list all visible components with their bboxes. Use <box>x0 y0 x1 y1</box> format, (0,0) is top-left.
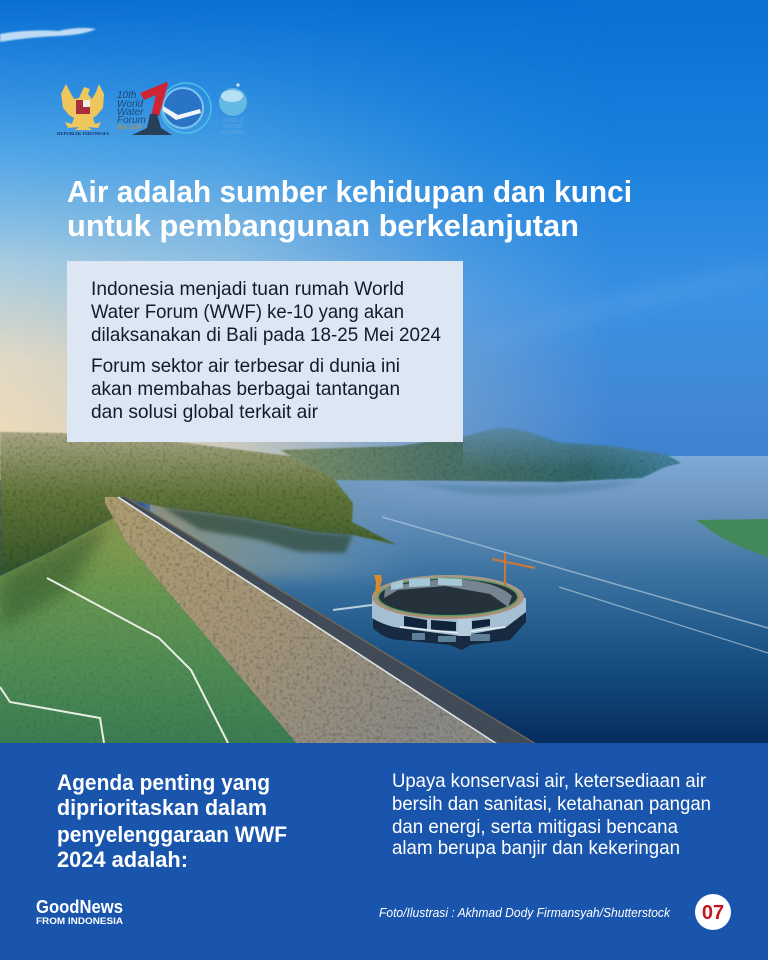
GoodNews logo: FROM INDONESIA <box>36 916 124 926</box>
title: untuk pembangunan berkelanjutan <box>67 208 579 243</box>
walkway <box>333 605 372 610</box>
panel text: host statement <box>91 278 441 346</box>
page number badge: 07 <box>702 902 724 924</box>
panel text: forum statement: akan membahas berbagai tantangan <box>91 378 400 400</box>
logos row <box>57 82 247 136</box>
logo: World Water Council: WATER <box>223 124 243 130</box>
green embankment <box>0 518 297 744</box>
logo: 10th World Water Forum: 10th <box>117 90 137 101</box>
logo: 10th World Water Forum: Bali 2024 <box>117 125 143 131</box>
panel text: host statement: dilaksanakan di Bali pada 18-25 Mei 2024 <box>91 324 441 346</box>
agenda description: alam berupa banjir dan kekeringan <box>392 837 680 859</box>
bottom band <box>0 743 768 960</box>
near forest <box>0 432 397 576</box>
panel text: forum statement <box>91 355 400 423</box>
logo: 10th World Water Forum <box>117 82 211 135</box>
agenda description: dan energi, serta mitigasi bencana <box>392 816 678 838</box>
panel text: forum statement: Forum sektor air terbesar di dunia ini <box>91 355 400 377</box>
background: sky <box>0 0 768 480</box>
water <box>150 456 768 744</box>
info panel <box>67 261 463 442</box>
logo: 10th World Water Forum: World <box>117 99 144 110</box>
dam road <box>118 496 537 744</box>
tower walls <box>372 596 526 636</box>
agenda heading <box>57 770 287 872</box>
agenda heading: penyelenggaraan WWF <box>57 822 287 847</box>
tower ring <box>372 575 524 619</box>
page number badge <box>695 894 731 930</box>
agenda description <box>392 770 711 859</box>
logo: garuda: REPUBLIK INDONESIA <box>57 131 109 136</box>
logo: 10th World Water Forum: Water <box>117 107 144 118</box>
photo credit: Foto/Ilustrasi : Akhmad Dody Firmansyah/Shutterstock <box>379 905 671 920</box>
title: Air adalah sumber kehidupan dan kunci <box>67 174 632 209</box>
GoodNews logo: GoodNews <box>36 897 123 917</box>
logo: World Water Council: WORLD <box>223 118 243 124</box>
GoodNews logo <box>36 897 124 926</box>
panel text: host statement: Water Forum (WWF) ke-10 yang akan <box>91 301 404 323</box>
crane <box>492 553 535 586</box>
title <box>67 174 632 243</box>
photo: reservoir and dam <box>0 428 768 744</box>
far hill <box>280 428 681 495</box>
agenda heading: diprioritaskan dalam <box>57 795 267 820</box>
logo: garuda <box>57 84 109 136</box>
agenda heading: 2024 adalah: <box>57 847 188 872</box>
logo: World Water Council: COUNCIL <box>221 130 245 136</box>
intake tower <box>333 553 535 650</box>
water lines <box>382 517 768 653</box>
agenda heading: Agenda penting yang <box>57 770 270 795</box>
floating vegetation <box>696 519 768 557</box>
agenda description: bersih dan sanitasi, ketahanan pangan <box>392 793 711 815</box>
back wall windows <box>384 579 512 607</box>
cloud wisp <box>0 28 96 42</box>
tower reflection <box>373 610 526 650</box>
panel text: forum statement: dan solusi global terkait air <box>91 401 318 423</box>
panel text: host statement: Indonesia menjadi tuan rumah World <box>91 278 404 300</box>
dam face <box>105 497 505 744</box>
agenda description: Upaya konservasi air, ketersediaan air <box>392 770 706 792</box>
logo: 10th World Water Forum: Forum <box>117 115 146 126</box>
logo: World Water Council <box>219 83 247 136</box>
